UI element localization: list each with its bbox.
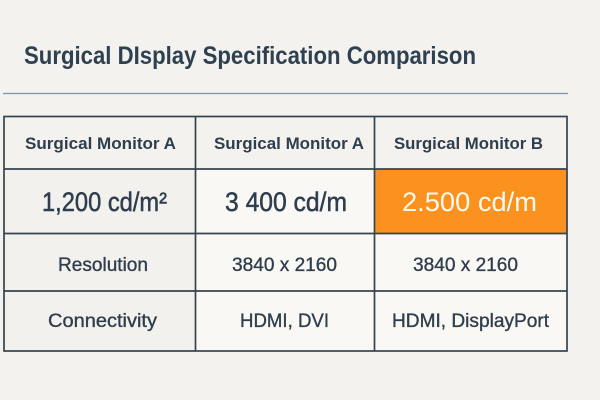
connectivity row [48,311,550,332]
header row: Surgical Monitor A [214,134,364,153]
title: Surgical DIsplay Specification Comparison [24,42,476,70]
comparison table [4,116,567,351]
header row: Surgical Monitor B [394,134,543,153]
resolution row [58,255,518,276]
connectivity row: HDMI, DVI [240,311,329,332]
resolution row: 3840 x 2160 [232,255,337,276]
brightness row: 2.500 cd/m [402,187,537,217]
connectivity row: HDMI, DisplayPort [392,311,550,332]
resolution row: Resolution [58,255,148,276]
table grid [4,116,567,351]
cell backgrounds [4,116,567,351]
brightness row [42,187,537,217]
header row: Surgical Monitor A [25,134,176,153]
header row [25,134,543,153]
brightness row: 1,200 cd/m² [42,187,167,217]
connectivity row: Connectivity [48,311,158,332]
resolution row: 3840 x 2160 [413,255,518,276]
brightness row: 3 400 cd/m [225,187,347,217]
